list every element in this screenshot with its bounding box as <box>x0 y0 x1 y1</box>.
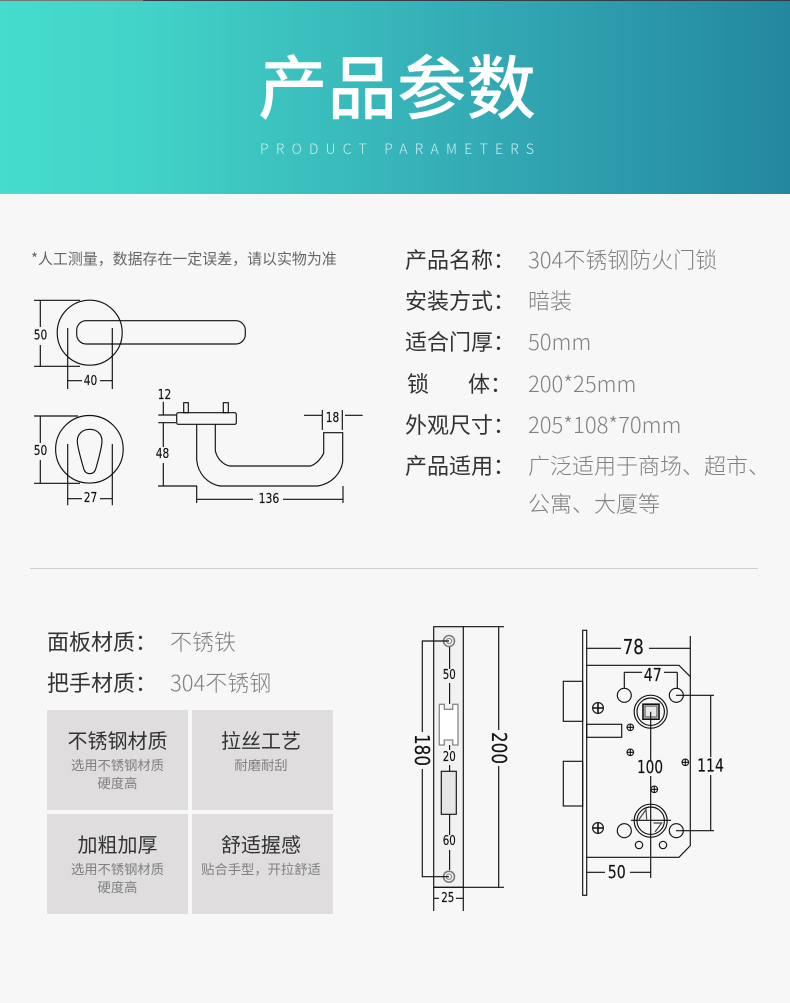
row: lock body: 体： <box>468 367 512 399</box>
mortise lock body drawing: 47 <box>644 665 662 686</box>
row: application: 公寓、大厦等 <box>528 487 660 519</box>
bottom screw <box>444 871 454 882</box>
mortise lock body drawing: 114 <box>697 756 724 776</box>
row: application: 产品适用： <box>405 449 515 481</box>
row: lock body: 200*25mm <box>528 367 636 399</box>
handle material <box>47 666 271 698</box>
top edge strip <box>0 0 790 1</box>
panel material: 面板材质： <box>47 625 157 657</box>
row: product name: 产品名称： <box>405 243 515 275</box>
row: lock body: 锁 <box>407 367 429 399</box>
handle side view drawing <box>156 388 363 507</box>
strike plate drawing: 20 <box>443 750 456 765</box>
row: door thickness: 50mm <box>528 325 591 357</box>
row: installation <box>405 284 572 316</box>
escutcheon keyhole drawing: 50 <box>34 444 47 459</box>
subtitle: PRODUCT PARAMETERS <box>260 139 541 159</box>
mortise lock body drawing: 100 <box>637 757 663 778</box>
deadbolt slot <box>441 771 456 814</box>
feature card: brushed finish <box>192 710 333 810</box>
handle front view drawing: 40 <box>84 374 97 389</box>
screws <box>593 703 689 833</box>
feature card: brushed finish: 拉丝工艺 <box>221 725 301 754</box>
upper spindle hub <box>634 695 667 728</box>
handle material: 304不锈钢 <box>170 666 271 698</box>
handle side view drawing: 48 <box>156 447 169 462</box>
row: application: 广泛适用于商场、超市、 <box>528 449 770 481</box>
faceplate <box>583 630 587 895</box>
row: installation: 安装方式： <box>405 284 515 316</box>
row: product name <box>405 243 717 275</box>
strike plate drawing: 180 <box>410 734 434 766</box>
strike plate drawing: 60 <box>443 834 456 849</box>
row: lock body <box>407 367 636 399</box>
bolts <box>563 681 622 806</box>
row: product name: 304不锈钢防火门锁 <box>528 243 717 275</box>
handle front view drawing: 50 <box>34 328 47 344</box>
row: door thickness <box>405 325 591 357</box>
escutcheon keyhole drawing: 27 <box>84 491 97 506</box>
strike plate drawing: 200 <box>487 732 511 764</box>
strike plate drawing: 25 <box>441 891 454 906</box>
feature card: comfortable grip <box>192 814 333 914</box>
measurement note: *人工测量，数据存在一定误差，请以实物为准 <box>31 248 337 269</box>
feature card: comfortable grip: 舒适握感 <box>221 829 301 858</box>
row: installation: 暗装 <box>528 284 572 316</box>
feature card: stainless material: 不锈钢材质 <box>68 725 168 754</box>
parameter list <box>405 243 770 519</box>
top screw <box>444 636 454 646</box>
handle side view drawing: 136 <box>259 492 279 507</box>
panel material: 不锈铁 <box>170 625 236 657</box>
mounting holes <box>617 688 683 849</box>
feature card: thickened: 硬度高 <box>98 876 137 896</box>
feature card: stainless material <box>47 710 188 810</box>
latch slot <box>439 704 458 745</box>
feature card: brushed finish: 耐磨耐刮 <box>234 755 288 774</box>
handle side view drawing: 12 <box>158 388 171 403</box>
panel material <box>47 625 236 657</box>
body <box>587 665 690 857</box>
feature card: stainless material: 硬度高 <box>98 772 137 792</box>
feature card: stainless material: 选用不锈钢材质 <box>71 755 164 774</box>
feature card: thickened <box>47 814 188 914</box>
feature card: thickened: 选用不锈钢材质 <box>71 859 164 878</box>
handle front view drawing <box>34 300 246 389</box>
row: door thickness: 适合门厚： <box>405 325 515 357</box>
mortise lock body drawing: 50 <box>608 862 626 883</box>
mortise lock body drawing <box>562 630 724 896</box>
row: dimensions: 外观尺寸： <box>405 408 515 440</box>
strike plate drawing: 50 <box>443 668 456 683</box>
header banner <box>0 0 790 194</box>
mortise lock body drawing: 78 <box>623 635 644 659</box>
feature card: comfortable grip: 贴合手型，开拉舒适 <box>201 859 321 878</box>
lower cylinder hub <box>631 804 671 837</box>
row: application <box>405 449 770 519</box>
handle side view drawing: 18 <box>326 411 339 426</box>
strike plate drawing <box>410 626 511 911</box>
row: dimensions <box>405 408 681 440</box>
feature card: thickened: 加粗加厚 <box>78 829 158 858</box>
title: 产品参数 <box>258 33 536 134</box>
handle material: 把手材质： <box>47 666 157 698</box>
row: dimensions: 205*108*70mm <box>528 408 681 440</box>
escutcheon keyhole drawing <box>34 414 124 506</box>
